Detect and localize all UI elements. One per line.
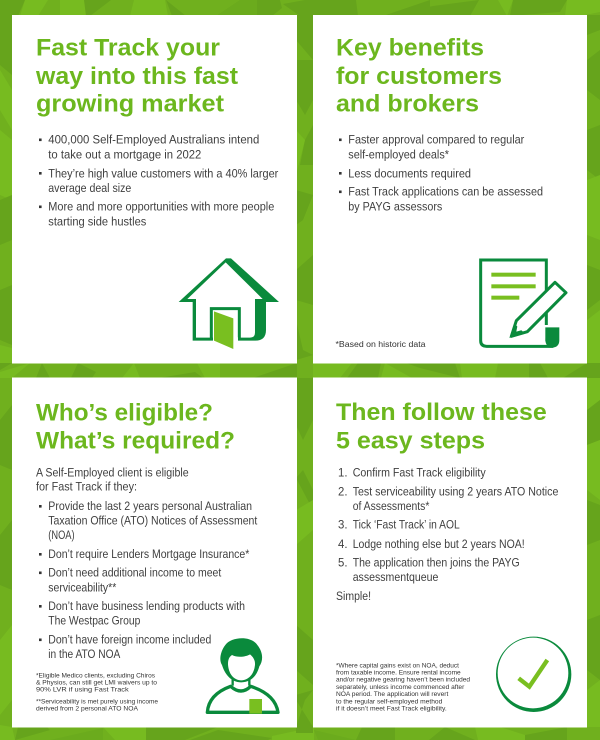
- intro text: [36, 465, 189, 494]
- panel: eligibility: [12, 378, 297, 728]
- heading: five steps: [336, 399, 547, 454]
- icon: check circle: [496, 637, 571, 712]
- bullet list: requirements: Don’t have business lending products with: [48, 599, 245, 613]
- numbered list: steps: Confirm Fast Track eligibility: [353, 465, 486, 479]
- bullet list: market facts: [39, 133, 278, 228]
- bullet list: requirements: Don’t have foreign income included: [48, 632, 211, 646]
- icon: document and pencil: [481, 260, 566, 348]
- bullet list: market facts: average deal size: [48, 181, 131, 195]
- numbered list: steps: Test serviceability using 2 years ATO Notice: [353, 485, 558, 499]
- heading: five steps: 5 easy steps: [336, 427, 485, 454]
- footnote: capital gains: from taxable income. Ensure rental income: [336, 670, 461, 677]
- numbered list: steps: Tick ‘Fast Track’ in AOL: [353, 518, 460, 532]
- footnote: capital gains: if it doesn’t meet Fast Track eligibility.: [336, 706, 447, 713]
- footnotes: eligibility: & Physios, can still get LMI waivers up to: [36, 679, 157, 686]
- heading: eligibility: [36, 400, 235, 455]
- heading: fast track: [35, 35, 238, 118]
- bullet list: benefits: Faster approval compared to regular: [348, 133, 524, 147]
- heading: eligibility: Who’s eligible?: [36, 400, 213, 427]
- closing text: Simple!: [336, 589, 371, 603]
- footnotes: eligibility: **Serviceability is met purely using income: [36, 698, 158, 705]
- bullet list: requirements: Don’t need additional income to meet: [48, 566, 222, 580]
- footnote: capital gains: NOA period. The application will revert: [336, 691, 448, 698]
- panel: fast track market: [12, 15, 297, 364]
- heading: key benefits: for customers: [336, 63, 502, 90]
- footnote: capital gains: [336, 662, 470, 713]
- bullet list: requirements: (NOA): [48, 528, 75, 542]
- heading: fast track: Fast Track your: [36, 35, 220, 62]
- footnotes: eligibility: [36, 672, 158, 712]
- intro text: for Fast Track if they:: [36, 480, 137, 494]
- panel: key benefits: [313, 15, 587, 364]
- bullet list: requirements: [39, 499, 258, 661]
- numbered list: steps: assessmentqueue: [353, 570, 438, 584]
- numbered list: steps: 3.: [338, 518, 348, 532]
- numbered list: steps: of Assessments*: [353, 499, 430, 513]
- bullet list: benefits: self-employed deals*: [348, 148, 449, 162]
- bullet list: market facts: starting side hustles: [48, 214, 146, 228]
- footnote: historic data: *Based on historic data: [336, 339, 426, 349]
- bullet list: requirements: Taxation Office (ATO) Notices of Assessment: [48, 513, 258, 527]
- heading: key benefits: and brokers: [336, 91, 479, 118]
- bullet list: market facts: to take out a mortgage in 2022: [48, 148, 201, 162]
- numbered list: steps: Lodge nothing else but 2 years NOA!: [353, 537, 525, 551]
- numbered list: steps: [338, 465, 558, 584]
- bullet list: benefits: by PAYG assessors: [348, 200, 442, 214]
- footnotes: eligibility: *Eligible Medico clients, excluding Chiros: [36, 672, 156, 679]
- bullet list: requirements: The Westpac Group: [48, 614, 140, 628]
- footnotes: eligibility: derived from 2 personal ATO NOA: [36, 705, 139, 712]
- bullet list: benefits: Less documents required: [348, 166, 471, 180]
- bullet list: market facts: They’re high value customers with a 40% larger: [48, 166, 278, 180]
- heading: five steps: Then follow these: [336, 399, 547, 426]
- bullet list: market facts: 400,000 Self-Employed Australians intend: [48, 133, 259, 147]
- numbered list: steps: 4.: [338, 537, 348, 551]
- icon: person: [207, 638, 278, 714]
- heading: fast track: way into this fast: [35, 63, 238, 90]
- panel: five steps: [313, 378, 587, 728]
- numbered list: steps: 2.: [338, 485, 348, 499]
- footnote: capital gains: separately, unless income commenced after: [336, 684, 465, 691]
- heading: eligibility: What’s required?: [36, 428, 235, 455]
- numbered list: steps: 5.: [338, 556, 348, 570]
- intro text: A Self-Employed client is eligible: [36, 465, 189, 479]
- bullet list: requirements: in the ATO NOA: [48, 647, 121, 661]
- footnote: capital gains: *Where capital gains exist on NOA, deduct: [336, 662, 459, 669]
- bullet list: requirements: serviceability**: [48, 580, 116, 594]
- bullet list: requirements: Don’t require Lenders Mortgage Insurance*: [48, 547, 249, 561]
- numbered list: steps: The application then joins the PAYG: [353, 556, 520, 570]
- footnote: capital gains: to the regular self-employed method: [336, 698, 443, 705]
- heading: key benefits: Key benefits: [336, 35, 484, 62]
- icon: house: [179, 258, 279, 349]
- footnote: capital gains: and/or negative gearing haven’t been included: [336, 677, 470, 684]
- bullet list: benefits: [339, 133, 543, 214]
- bullet list: benefits: Fast Track applications can be assessed: [348, 185, 543, 199]
- bullet list: requirements: Provide the last 2 years personal Australian: [48, 499, 252, 513]
- heading: key benefits: [336, 35, 502, 118]
- footnotes: eligibility: 90% LVR if using Fast Track: [36, 686, 129, 693]
- heading: fast track: growing market: [36, 91, 224, 118]
- bullet list: market facts: More and more opportunities with more people: [48, 200, 274, 214]
- numbered list: steps: 1.: [338, 465, 348, 479]
